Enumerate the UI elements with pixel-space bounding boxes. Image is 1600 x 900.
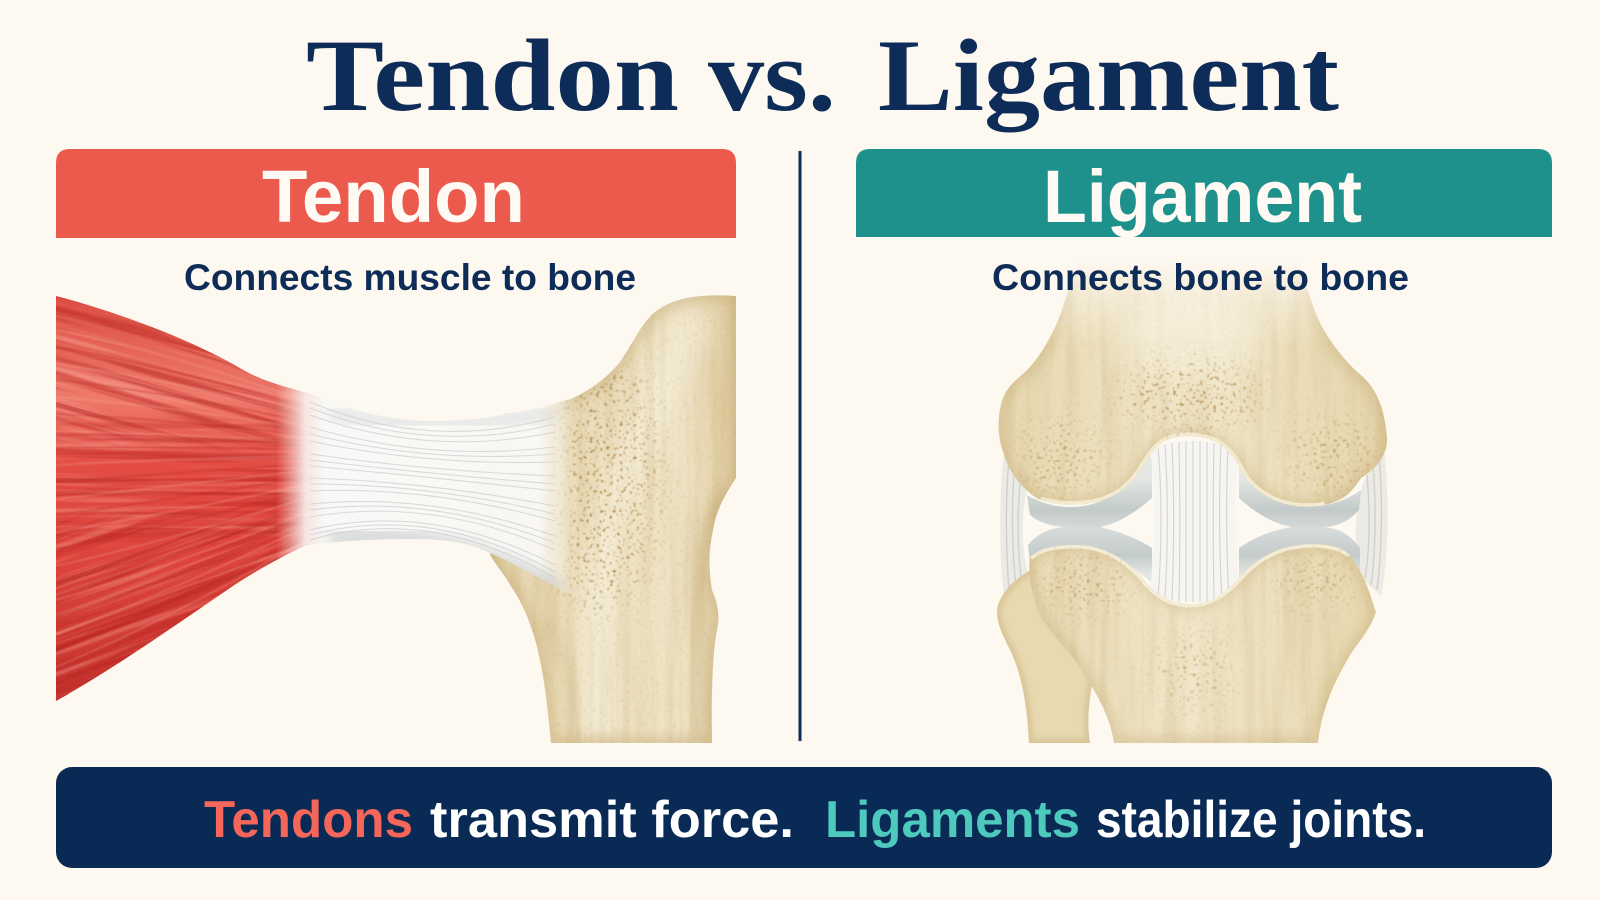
summary bar (56, 767, 1552, 868)
ligament subtitle: Connects bone to bone (992, 257, 1409, 298)
summary: transmit force: transmit force. (430, 791, 794, 849)
illustration: knee joint (990, 240, 1390, 750)
illustration: muscle, tendon and bone (56, 295, 736, 743)
tendon header (56, 149, 736, 238)
panel: tendon (56, 149, 736, 743)
ligament header: Ligament (1043, 155, 1362, 238)
title (306, 19, 1339, 133)
summary: tendons: Tendons (204, 791, 413, 849)
femur (998, 268, 1388, 507)
side ligament right (1356, 448, 1387, 596)
panel: ligament (856, 149, 1552, 750)
tendon fibres (278, 385, 578, 594)
summary: stabilize joints: stabilize joints. (1096, 791, 1426, 849)
bone speckles (1014, 294, 1382, 728)
tendon subtitle: Connects muscle to bone (184, 257, 636, 298)
muscle (56, 296, 326, 701)
title: Ligament (878, 19, 1339, 133)
cartilage (1027, 450, 1361, 582)
summary: ligaments: Ligaments (825, 791, 1080, 849)
fibula (997, 568, 1094, 743)
tibia (1020, 540, 1380, 750)
center divider (798, 151, 802, 741)
title: Tendon (306, 19, 679, 133)
bone (480, 290, 740, 750)
title: vs. (708, 19, 836, 133)
ligament header (856, 149, 1552, 238)
side ligament left (1000, 452, 1032, 596)
tendon header: Tendon (262, 155, 525, 238)
central ligament (1150, 441, 1240, 602)
